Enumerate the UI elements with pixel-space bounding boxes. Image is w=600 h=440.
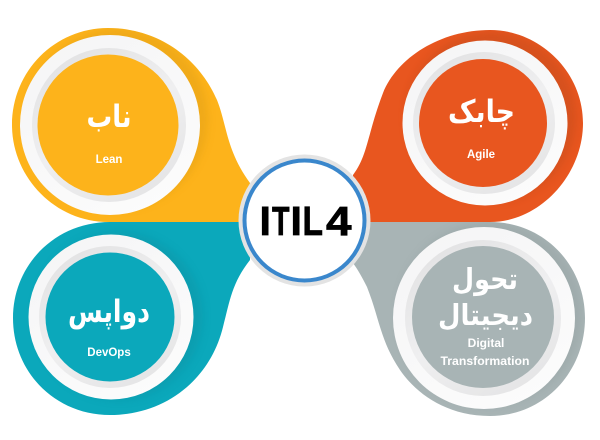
panel: Digital Transformation [353,222,585,416]
panel: DevOps [13,222,250,415]
title: I [260,198,271,244]
inner circle [38,54,178,196]
center badge [238,154,370,286]
title: L [302,198,323,244]
Persian label: چابک [448,94,515,130]
panel: Agile [353,30,583,222]
white ring [20,35,200,215]
panel: Digital Transformation: Transformation [440,354,530,368]
Persian label: تحول [452,262,518,296]
Persian label: ناب [86,99,132,135]
teardrop shape: yellow [12,28,250,222]
teardrop shape: grey [353,222,585,416]
title [260,198,352,244]
inner circle [412,246,554,388]
English label: Lean [96,154,122,166]
English label: Agile [467,149,495,161]
Persian label: دواپس [68,294,150,330]
English label: DevOps [87,347,131,359]
teardrop shape: orange [353,30,583,222]
inner circle [419,59,547,187]
white ring [393,227,575,409]
English label: Digital [468,336,504,350]
teardrop shape: teal [13,222,250,415]
white ring [28,234,194,400]
panel: Digital Transformation: دیجیتال [438,298,533,332]
white ring [402,40,568,206]
title: T [272,199,290,244]
title: 4 [326,199,352,244]
panel: Lean [12,28,250,222]
inner circle [46,252,174,382]
title: I [290,198,302,244]
